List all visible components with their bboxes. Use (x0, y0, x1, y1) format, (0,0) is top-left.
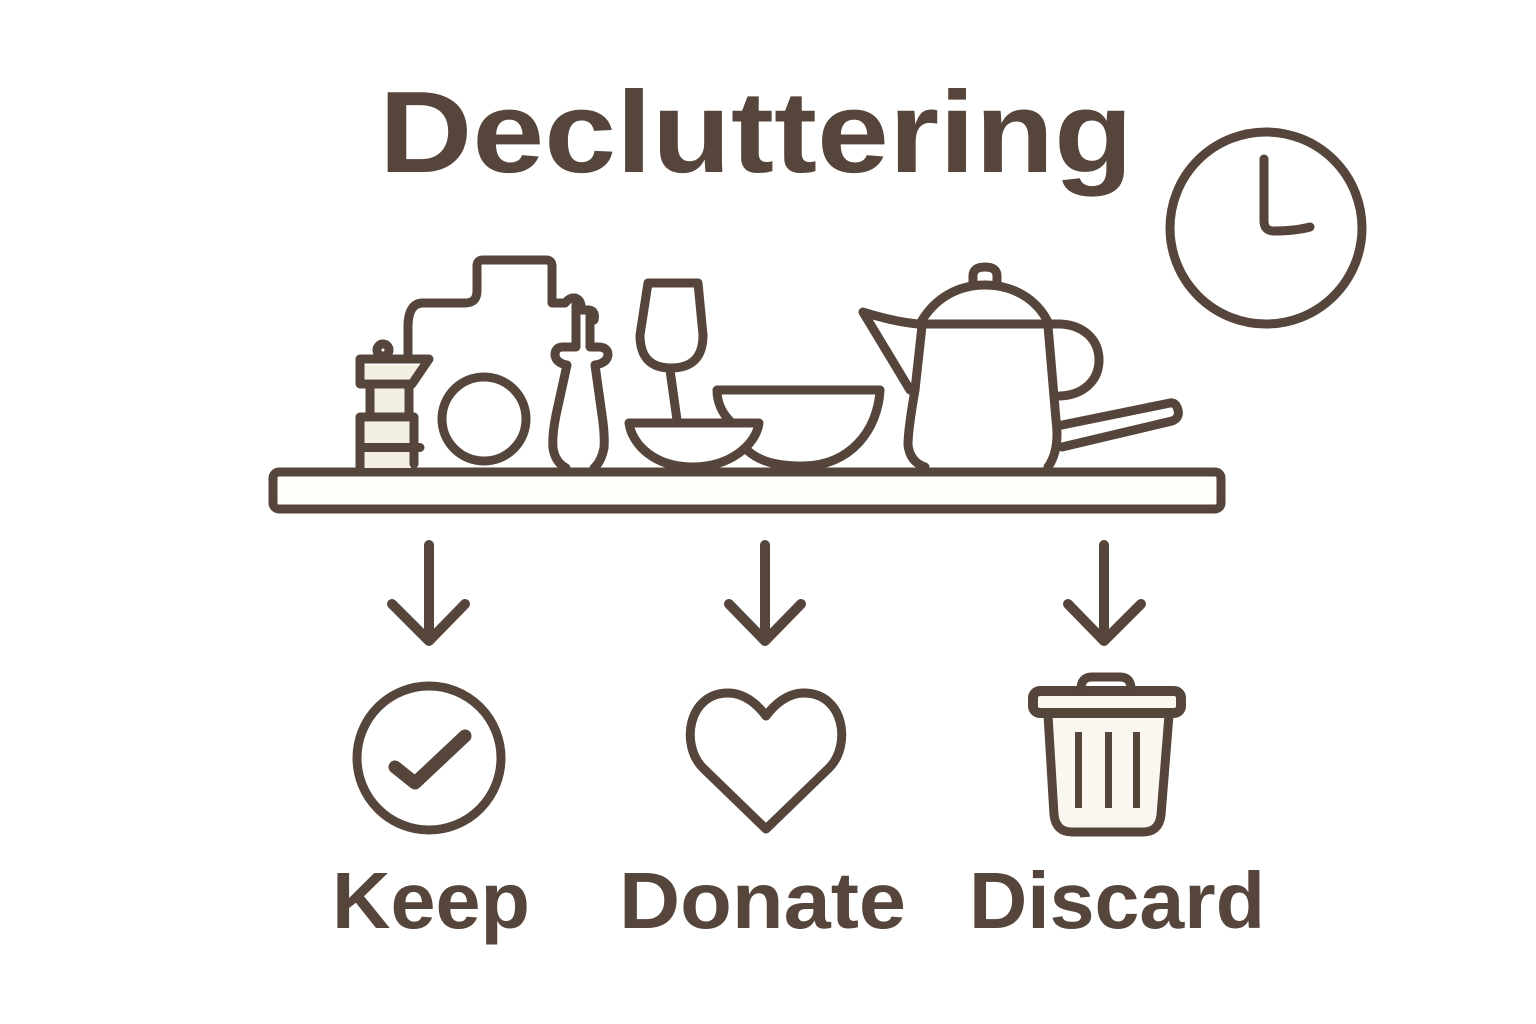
item: small bowl (629, 423, 759, 467)
arrow: to keep (392, 545, 465, 641)
icon: trash can (1033, 677, 1181, 832)
arrow: to donate (729, 545, 801, 641)
shelf with kitchen items (273, 260, 1221, 509)
item: oil bottle (553, 298, 608, 468)
shelf (273, 472, 1221, 509)
item: pepper grinder (360, 344, 429, 468)
item: box outline behind grinder (408, 260, 565, 356)
item: round plate (442, 377, 526, 461)
arrow: to discard (1068, 545, 1141, 641)
icon: check mark in circle (357, 686, 501, 830)
label: discard: Discard (969, 856, 1265, 945)
title: Decluttering (379, 67, 1133, 197)
item: teapot (863, 267, 1178, 467)
label: donate: Donate (619, 856, 906, 945)
icon: heart (690, 693, 842, 829)
item: large bowl (717, 390, 880, 466)
label: keep: Keep (332, 856, 530, 945)
icon: clock (1170, 132, 1362, 324)
item: wine glass (640, 283, 703, 420)
